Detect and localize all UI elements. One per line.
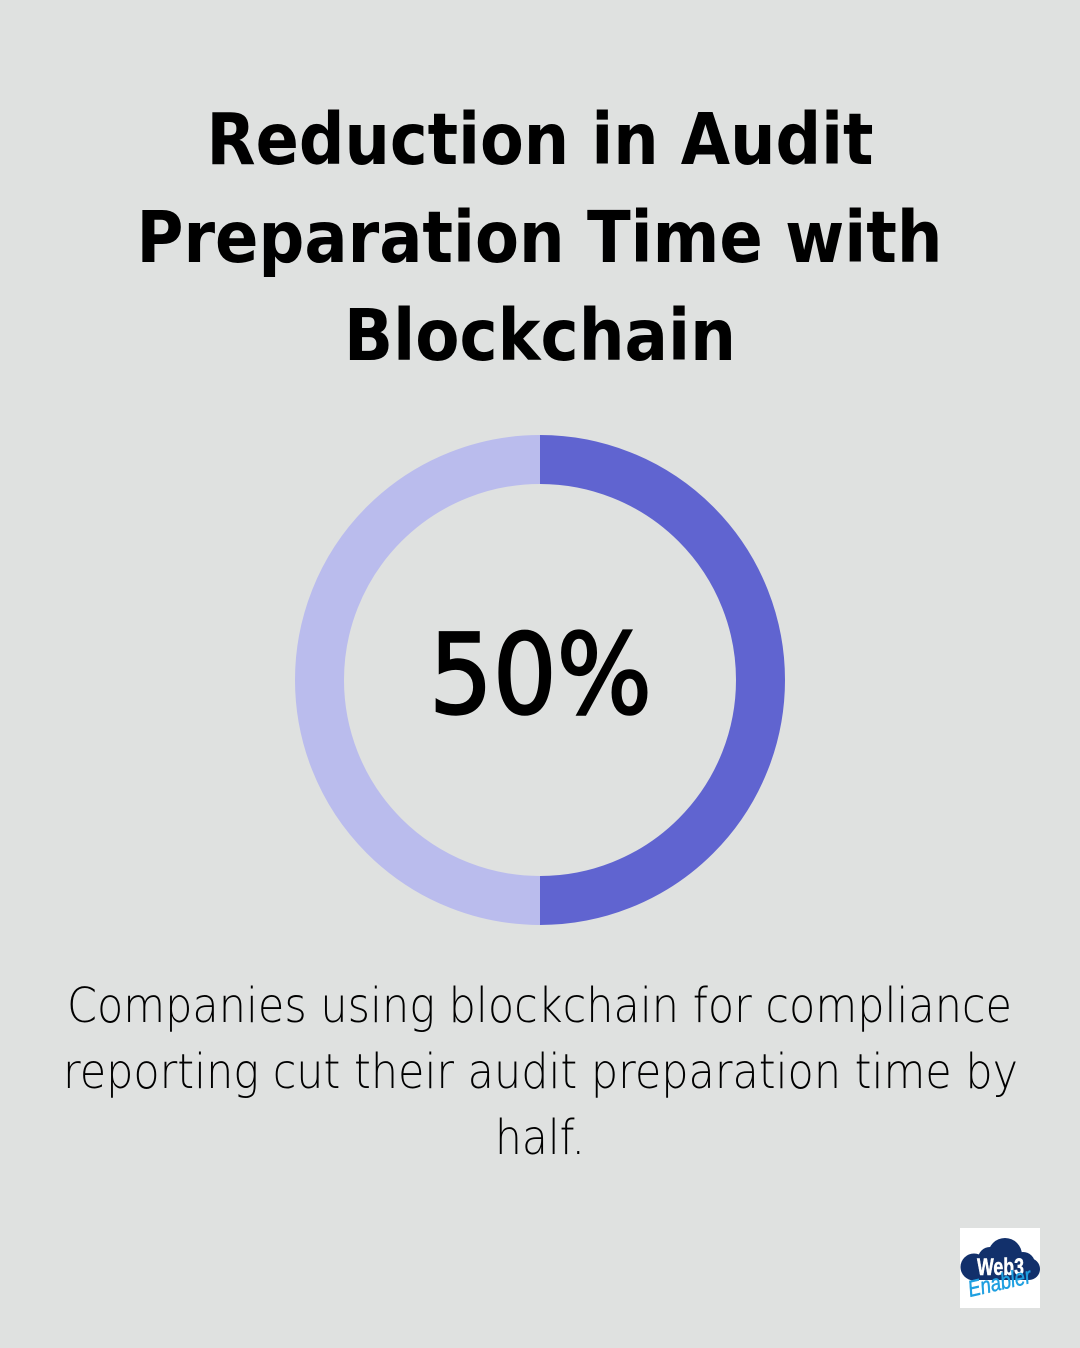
logo wordmark: Web3: Web3: [977, 1254, 1024, 1281]
description text: half.: [495, 1110, 585, 1166]
ring segment: remaining half: [320, 460, 540, 900]
title: Preparation Time with: [136, 196, 942, 279]
title: Blockchain: [344, 294, 736, 377]
ring segment: 50% reduction: [540, 460, 760, 900]
logo: Web3 Enabler: [960, 1228, 1040, 1308]
donut chart: 50%: [320, 460, 760, 900]
logo wordmark: Enabler: Enabler: [965, 1262, 1035, 1302]
center value: 50%: [429, 611, 652, 740]
title: Reduction in Audit: [206, 98, 874, 181]
icon: cloud: [960, 1238, 1040, 1280]
description text: [63, 978, 1018, 1166]
logo background: [960, 1228, 1040, 1308]
title: [136, 98, 942, 377]
